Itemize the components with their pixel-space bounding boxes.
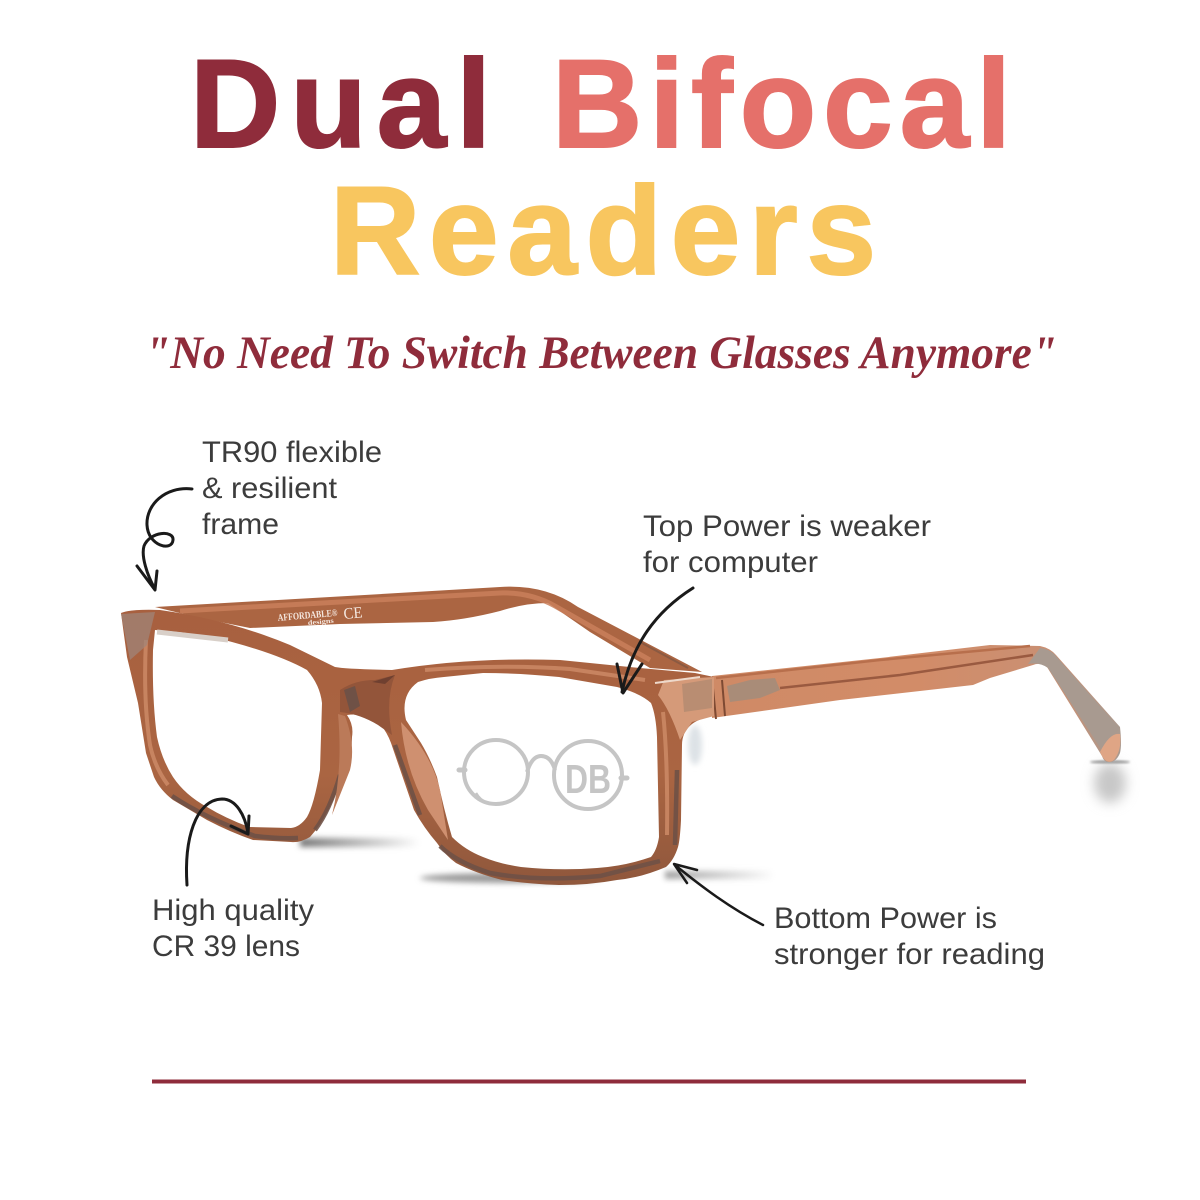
label: frame material: frame bbox=[202, 508, 279, 541]
front frame bbox=[121, 610, 714, 885]
tagline: "No Need To Switch Between Glasses Anymore" bbox=[145, 327, 1057, 379]
bottom divider bbox=[152, 1080, 1026, 1084]
frame light rim bbox=[145, 640, 667, 835]
title: Dual bbox=[190, 35, 491, 174]
DB logo: DB bbox=[565, 756, 611, 802]
temple logo text bbox=[277, 604, 363, 627]
arrow: top power bbox=[617, 588, 693, 693]
near temple bbox=[712, 645, 1121, 762]
inner lens reflection bbox=[157, 632, 228, 640]
label: lens bbox=[152, 894, 314, 963]
arrow: frame bbox=[137, 489, 192, 590]
label: bottom power bbox=[774, 902, 1045, 971]
hinge block bbox=[658, 677, 714, 740]
glasses photo bbox=[121, 587, 1130, 885]
title bbox=[190, 35, 1011, 301]
left nose pad bbox=[332, 714, 352, 815]
label: bottom power: stronger for reading bbox=[774, 938, 1045, 971]
far temple bbox=[155, 587, 702, 672]
temple logo text: AFFORDABLE® bbox=[277, 608, 338, 624]
temple logo text: designs bbox=[307, 617, 334, 627]
arrow: bottom power bbox=[674, 864, 763, 925]
temple logo text: CE bbox=[343, 604, 363, 623]
label: bottom power: Bottom Power is bbox=[774, 902, 997, 935]
label: frame material: TR90 flexible bbox=[202, 436, 382, 469]
label: lens: CR 39 lens bbox=[152, 930, 300, 963]
label: top power: for computer bbox=[643, 546, 818, 579]
label: lens: High quality bbox=[152, 894, 314, 927]
label: top power: Top Power is weaker bbox=[643, 510, 931, 543]
arrow: lens bbox=[187, 799, 249, 885]
right nose pad bbox=[401, 722, 448, 840]
title: Bifocal bbox=[552, 35, 1011, 174]
ground shadows bbox=[300, 725, 1130, 883]
DB logo bbox=[459, 740, 627, 809]
label: frame material: & resilient bbox=[202, 472, 337, 505]
title: Readers bbox=[330, 162, 876, 301]
frame dark lower edge bbox=[172, 745, 677, 878]
bridge bbox=[340, 675, 395, 735]
label: top power bbox=[643, 510, 931, 579]
label: frame material bbox=[202, 436, 382, 541]
